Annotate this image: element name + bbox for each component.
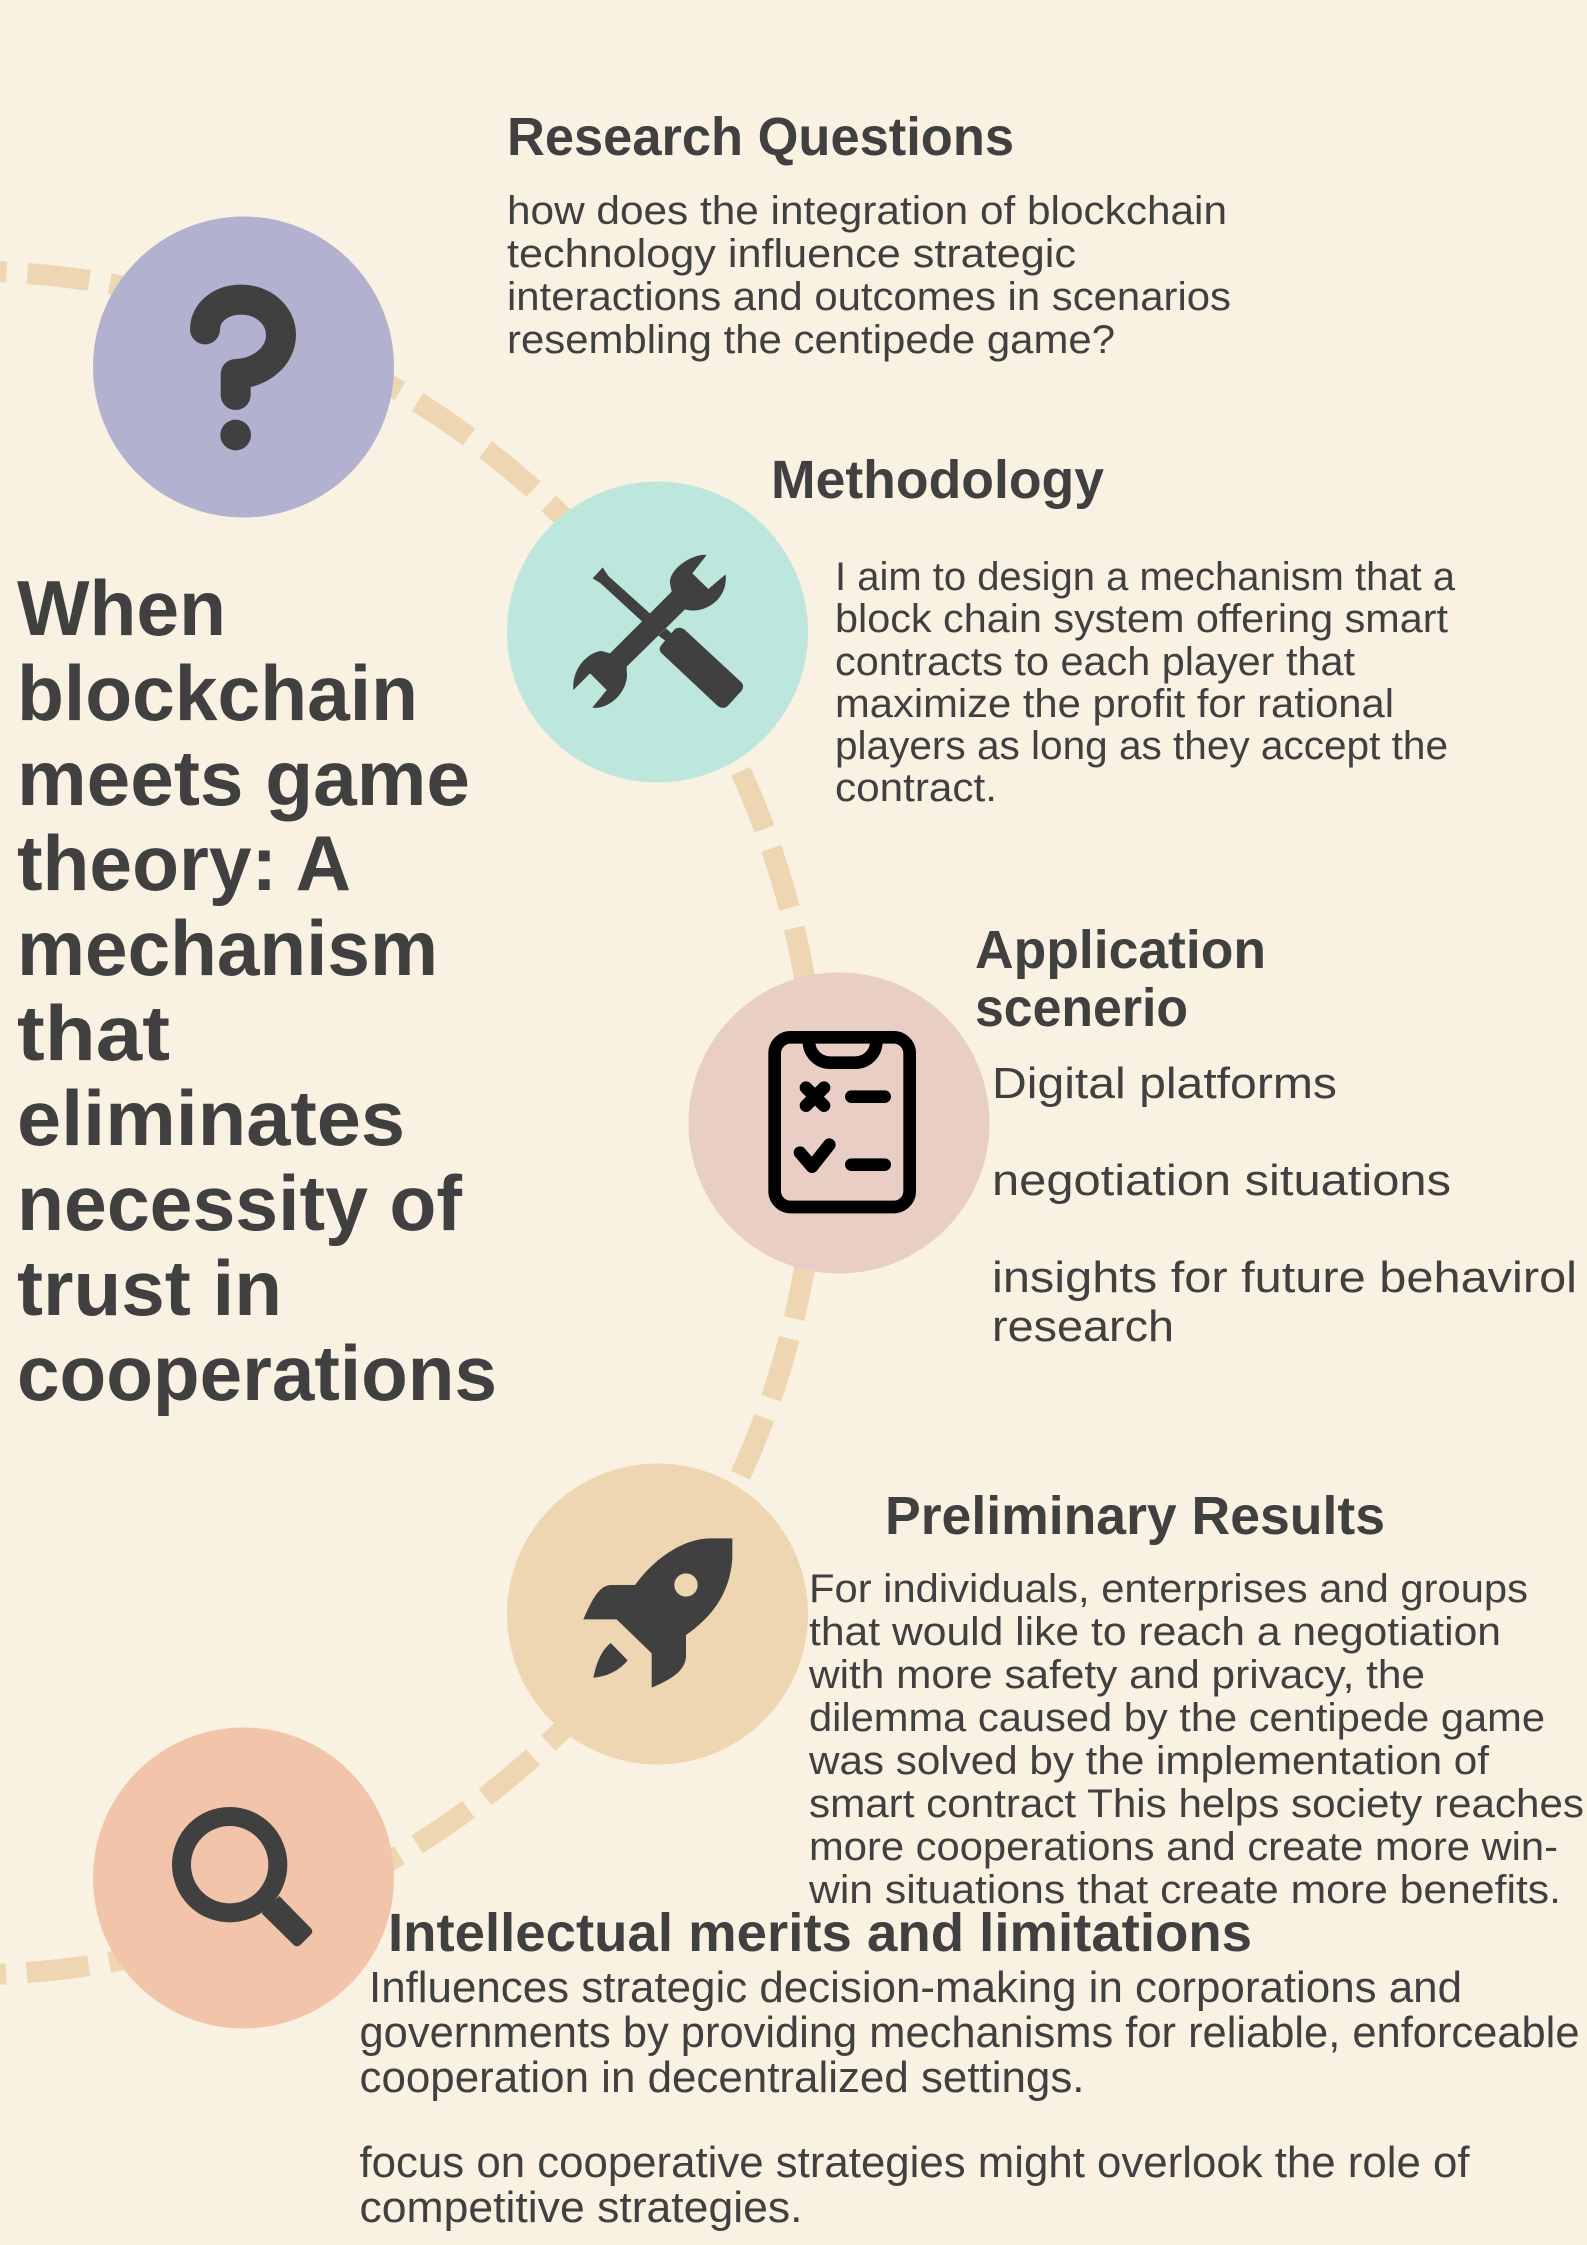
text: application list: negotiation situations <box>992 1156 1451 1205</box>
heading: application scenerio: scenerio <box>975 978 1188 1038</box>
title: necessity of <box>17 1159 463 1247</box>
heading: application scenerio: Application <box>975 920 1266 980</box>
text: merits and limitations body <box>360 1963 1580 2232</box>
panel: intellectual merits and limitations <box>360 1903 1580 2232</box>
text: methodology body: I aim to design a mechanism that a <box>835 555 1456 599</box>
title: that <box>17 989 170 1077</box>
panel: methodology <box>771 450 1456 810</box>
node: methodology circle <box>507 482 808 782</box>
text: preliminary results body: more cooperations and create more win- <box>809 1825 1558 1869</box>
title: mechanism <box>17 904 438 992</box>
title: When <box>17 564 226 652</box>
panel: research questions <box>507 107 1231 362</box>
text: preliminary results body: dilemma caused by the centipede game <box>809 1696 1545 1740</box>
text: preliminary results body: was solved by the implementation of <box>808 1739 1490 1783</box>
title: theory: A <box>17 819 351 907</box>
title: cooperations <box>17 1329 497 1417</box>
text: application list <box>992 1059 1577 1351</box>
text: research question body: interactions and outcomes in scenarios <box>507 275 1231 319</box>
text: methodology body: contract. <box>835 766 997 810</box>
title: eliminates <box>17 1074 405 1162</box>
text: preliminary results body: win situations that create more benefits. <box>808 1868 1561 1912</box>
heading: intellectual merits and limitations: Intellectual merits and limitations <box>388 1903 1252 1963</box>
text: preliminary results body: with more safety and privacy, the <box>808 1653 1425 1697</box>
heading: application scenerio <box>975 920 1266 1038</box>
text: merits and limitations body: cooperation in decentralized settings. <box>360 2053 1084 2102</box>
node: preliminary results circle <box>507 1464 808 1764</box>
icon: wrench and screwdriver <box>573 555 743 708</box>
text: merits and limitations body: governments by providing mechanisms for reliable, enforceable <box>360 2008 1580 2057</box>
title <box>17 564 497 1417</box>
title: blockchain <box>17 649 418 737</box>
panel: application scenario <box>975 920 1577 1351</box>
text: preliminary results body: smart contract This helps society reaches <box>809 1782 1584 1826</box>
title: meets game <box>17 734 470 822</box>
text: merits and limitations body: Influences strategic decision-making in corporations and <box>369 1963 1462 2012</box>
heading: research questions: Research Questions <box>507 107 1014 167</box>
text: preliminary results body <box>808 1567 1584 1912</box>
heading: preliminary results: Preliminary Results <box>885 1486 1385 1546</box>
heading: methodology: Methodology <box>771 450 1104 510</box>
panel: preliminary results <box>808 1486 1584 1912</box>
node: application circle <box>688 972 990 1274</box>
dashed connecting arc <box>0 271 817 1975</box>
text: methodology body: players as long as they accept the <box>835 724 1448 768</box>
text: merits and limitations body: competitive strategies. <box>360 2183 802 2232</box>
text: application list: Digital platforms <box>992 1059 1337 1108</box>
text: methodology body: maximize the profit for rational <box>835 682 1394 726</box>
icon: magnifying glass <box>181 1816 312 1946</box>
text: preliminary results body: For individuals, enterprises and groups <box>809 1567 1528 1611</box>
icon: rocket <box>583 1538 732 1688</box>
node: intellectual merits circle <box>93 1728 394 2028</box>
text: research question body: how does the integration of blockchain <box>507 189 1227 233</box>
title: trust in <box>17 1244 282 1332</box>
text: merits and limitations body: focus on cooperative strategies might overlook the role of <box>360 2138 1470 2187</box>
text: methodology body: block chain system offering smart <box>835 597 1448 641</box>
icon: checklist clipboard <box>775 1037 910 1207</box>
node: research questions circle <box>93 216 394 518</box>
text: application list: insights for future behavirol <box>992 1253 1577 1302</box>
text: methodology body <box>835 555 1456 810</box>
text: research question body: technology influence strategic <box>507 232 1076 276</box>
text: research question body: resembling the centipede game? <box>507 318 1115 362</box>
text: application list: research <box>992 1302 1174 1351</box>
icon: question mark <box>205 300 281 450</box>
text: preliminary results body: that would like to reach a negotiation <box>809 1610 1501 1654</box>
text: methodology body: contracts to each player that <box>835 640 1355 684</box>
text: research question body <box>507 189 1231 362</box>
